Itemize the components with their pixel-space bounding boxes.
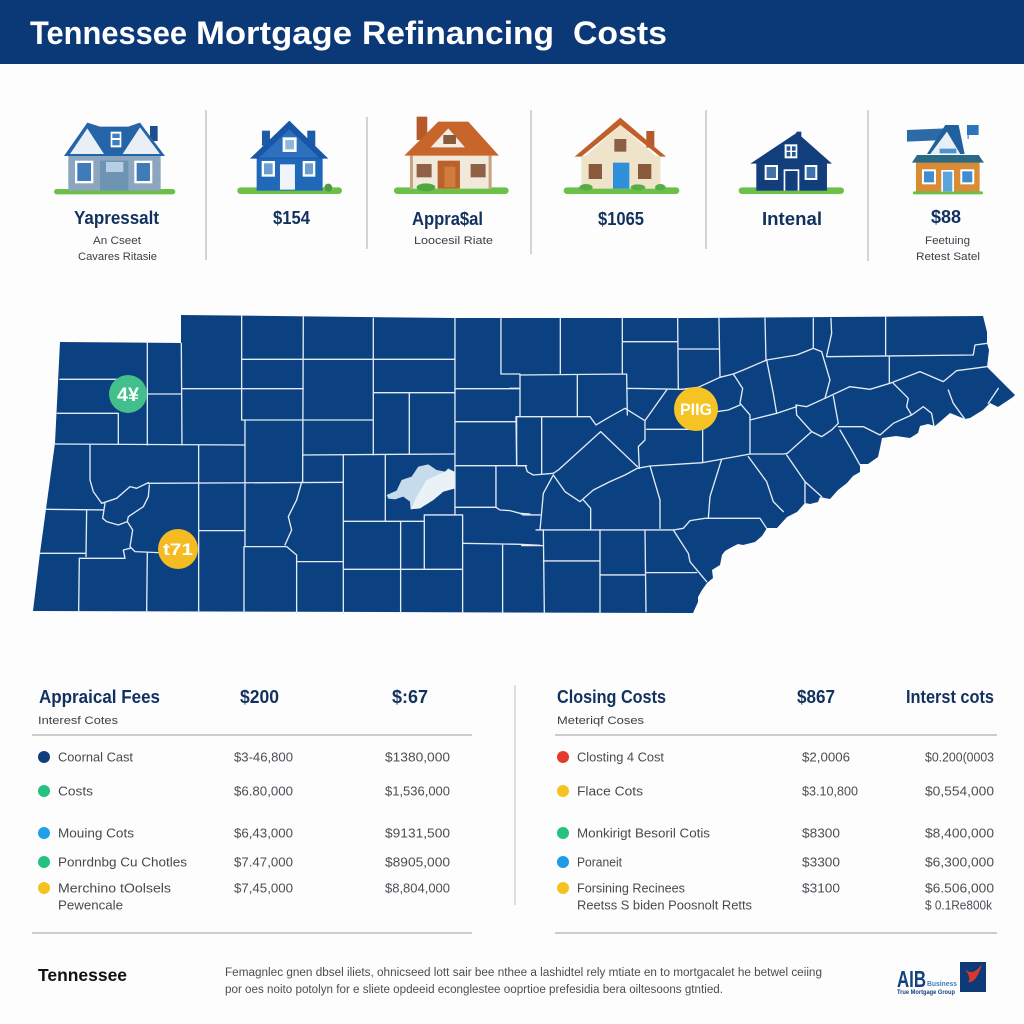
heading: closing costs: Meteriqf Coses xyxy=(557,715,645,727)
row: monkirigt: $8300 xyxy=(802,826,840,840)
row: poranit: $3300 xyxy=(802,856,840,870)
logo: True Mortgage Group xyxy=(897,990,955,996)
marker: yellow south-west: t71 xyxy=(163,540,193,559)
footer state name: Tennessee xyxy=(38,965,127,985)
logo xyxy=(897,962,986,996)
logo: Business xyxy=(927,981,957,988)
row: coarnal cast: $3-46,800 xyxy=(234,750,293,764)
heading: closing costs: Interst cots xyxy=(906,687,994,707)
label: $88: Feetuing xyxy=(925,235,970,247)
title xyxy=(30,15,667,51)
row: costs: Costs xyxy=(58,784,93,798)
row: place cots: $3.10,800 xyxy=(802,784,858,798)
row: coarnal cast: Coornal Cast xyxy=(58,750,134,764)
row: moving costs: Mouing Cots xyxy=(58,826,134,840)
row: merchino: Pewencale xyxy=(58,898,123,912)
row: porninbg: Ponrdnbg Cu Chotles xyxy=(58,856,187,870)
title: Refinancing xyxy=(362,15,554,51)
row: coarnal cast: $1380,000 xyxy=(385,750,450,764)
row: poranit: Poraneit xyxy=(577,856,623,870)
row: forsining: $ 0.1Re800k xyxy=(925,898,993,912)
title: Costs xyxy=(573,15,667,51)
label: $154: $154 xyxy=(273,208,310,228)
panel: house icon row xyxy=(54,110,984,263)
title: Mortgage xyxy=(196,15,352,51)
label: Appraisal: Appra$al xyxy=(412,209,483,229)
row: forsining: Reetss S biden Poosnolt Retts xyxy=(577,898,752,912)
row: poranit: $6,300,000 xyxy=(925,856,994,870)
heading: closing costs xyxy=(557,687,994,727)
row: poranit xyxy=(557,856,994,870)
row: merchino: $7,45,000 xyxy=(234,882,293,896)
heading: closing costs: Closing Costs xyxy=(557,687,666,707)
row: monkirigt xyxy=(557,826,994,840)
label: Yapressalt xyxy=(74,208,159,263)
label: Yapressalt: An Cseet xyxy=(93,235,141,247)
row: monkirigt: Monkirigt Besoril Cotis xyxy=(577,826,710,840)
row: place cots xyxy=(557,784,994,798)
row: forsining: $6.506,000 xyxy=(925,882,994,896)
logo: AIB xyxy=(897,966,926,992)
row: closing cost: Closting 4 Cost xyxy=(577,750,665,764)
icon: navy house xyxy=(739,132,844,194)
row: closing cost: $2,0006 xyxy=(802,750,850,764)
label: $88: Retest Satel xyxy=(916,251,980,263)
map of Tennessee counties xyxy=(33,315,1015,613)
row: moving costs: $9131,500 xyxy=(385,826,450,840)
title: Tennessee xyxy=(30,15,187,51)
row: moving costs xyxy=(38,826,450,840)
icon: grey-blue house xyxy=(54,123,175,194)
row: place cots: $0,554,000 xyxy=(925,784,994,798)
row: merchino xyxy=(38,882,450,912)
panel: appraisal fees table xyxy=(32,687,472,933)
footer note: Femagnlec gnen dbsel iliets, ohnicseed lott sair bee nthee a lashidtel rely mtiate en to mortgacalet he betwel ceiing xyxy=(225,967,822,979)
row: forsining: Forsining Recinees xyxy=(577,882,685,896)
row: forsining xyxy=(557,882,994,912)
row: coarnal cast xyxy=(38,750,450,764)
row: merchino: $8,804,000 xyxy=(385,882,450,896)
row: costs: $1,536,000 xyxy=(385,784,450,798)
row: costs xyxy=(38,784,450,798)
icon: blue house xyxy=(237,121,342,194)
heading: appraisal fees: $:67 xyxy=(392,687,428,707)
label: Yapressalt: Yapressalt xyxy=(74,208,159,228)
header banner xyxy=(0,0,1024,64)
row: merchino: Merchino tOolsels xyxy=(58,882,171,896)
label: $88: $88 xyxy=(931,207,961,227)
row: closing cost: $0.200(0003 xyxy=(925,750,994,764)
row: porninbg: $7.47,000 xyxy=(234,856,293,870)
icon: cream house xyxy=(564,118,679,194)
row: monkirigt: $8,400,000 xyxy=(925,826,994,840)
marker: yellow south-west xyxy=(158,529,198,569)
label: Yapressalt: Cavares Ritasie xyxy=(78,251,157,263)
lake xyxy=(387,464,455,509)
footer note: por oes noito potolyn for e sliete opdeeid econglestee ooprtioe prefesidia bera oiltesoons gtntied. xyxy=(225,984,723,996)
marker: green xyxy=(109,375,147,413)
row: forsining: $3100 xyxy=(802,882,840,896)
label: Intenal: Intenal xyxy=(762,209,822,229)
heading: appraisal fees: Appraical Fees xyxy=(39,687,160,707)
label: $1065: $1065 xyxy=(598,209,644,229)
panel: closing costs table xyxy=(555,687,997,933)
heading: appraisal fees: Interesf Cotes xyxy=(38,715,119,727)
footer note xyxy=(225,967,822,996)
label: Appraisal: Loocesil Riate xyxy=(414,235,493,247)
icon: orange-roof house xyxy=(394,117,509,194)
marker: yellow east: PIIG xyxy=(680,400,712,419)
row: place cots: Flace Cots xyxy=(577,784,643,798)
row: closing cost xyxy=(557,750,994,764)
footer xyxy=(38,962,986,996)
marker: yellow east xyxy=(674,387,718,431)
heading: appraisal fees: $200 xyxy=(240,687,279,707)
marker: green: 4¥ xyxy=(117,385,139,406)
row: porninbg: $8905,000 xyxy=(385,856,450,870)
label: Appraisal xyxy=(412,209,493,247)
icon: orange house with blue roof and flag xyxy=(907,125,984,194)
row: costs: $6.80,000 xyxy=(234,784,293,798)
row: moving costs: $6,43,000 xyxy=(234,826,293,840)
heading: appraisal fees xyxy=(38,687,428,727)
heading: closing costs: $867 xyxy=(797,687,835,707)
label: $88 xyxy=(916,207,980,263)
row: porninbg xyxy=(38,856,450,870)
